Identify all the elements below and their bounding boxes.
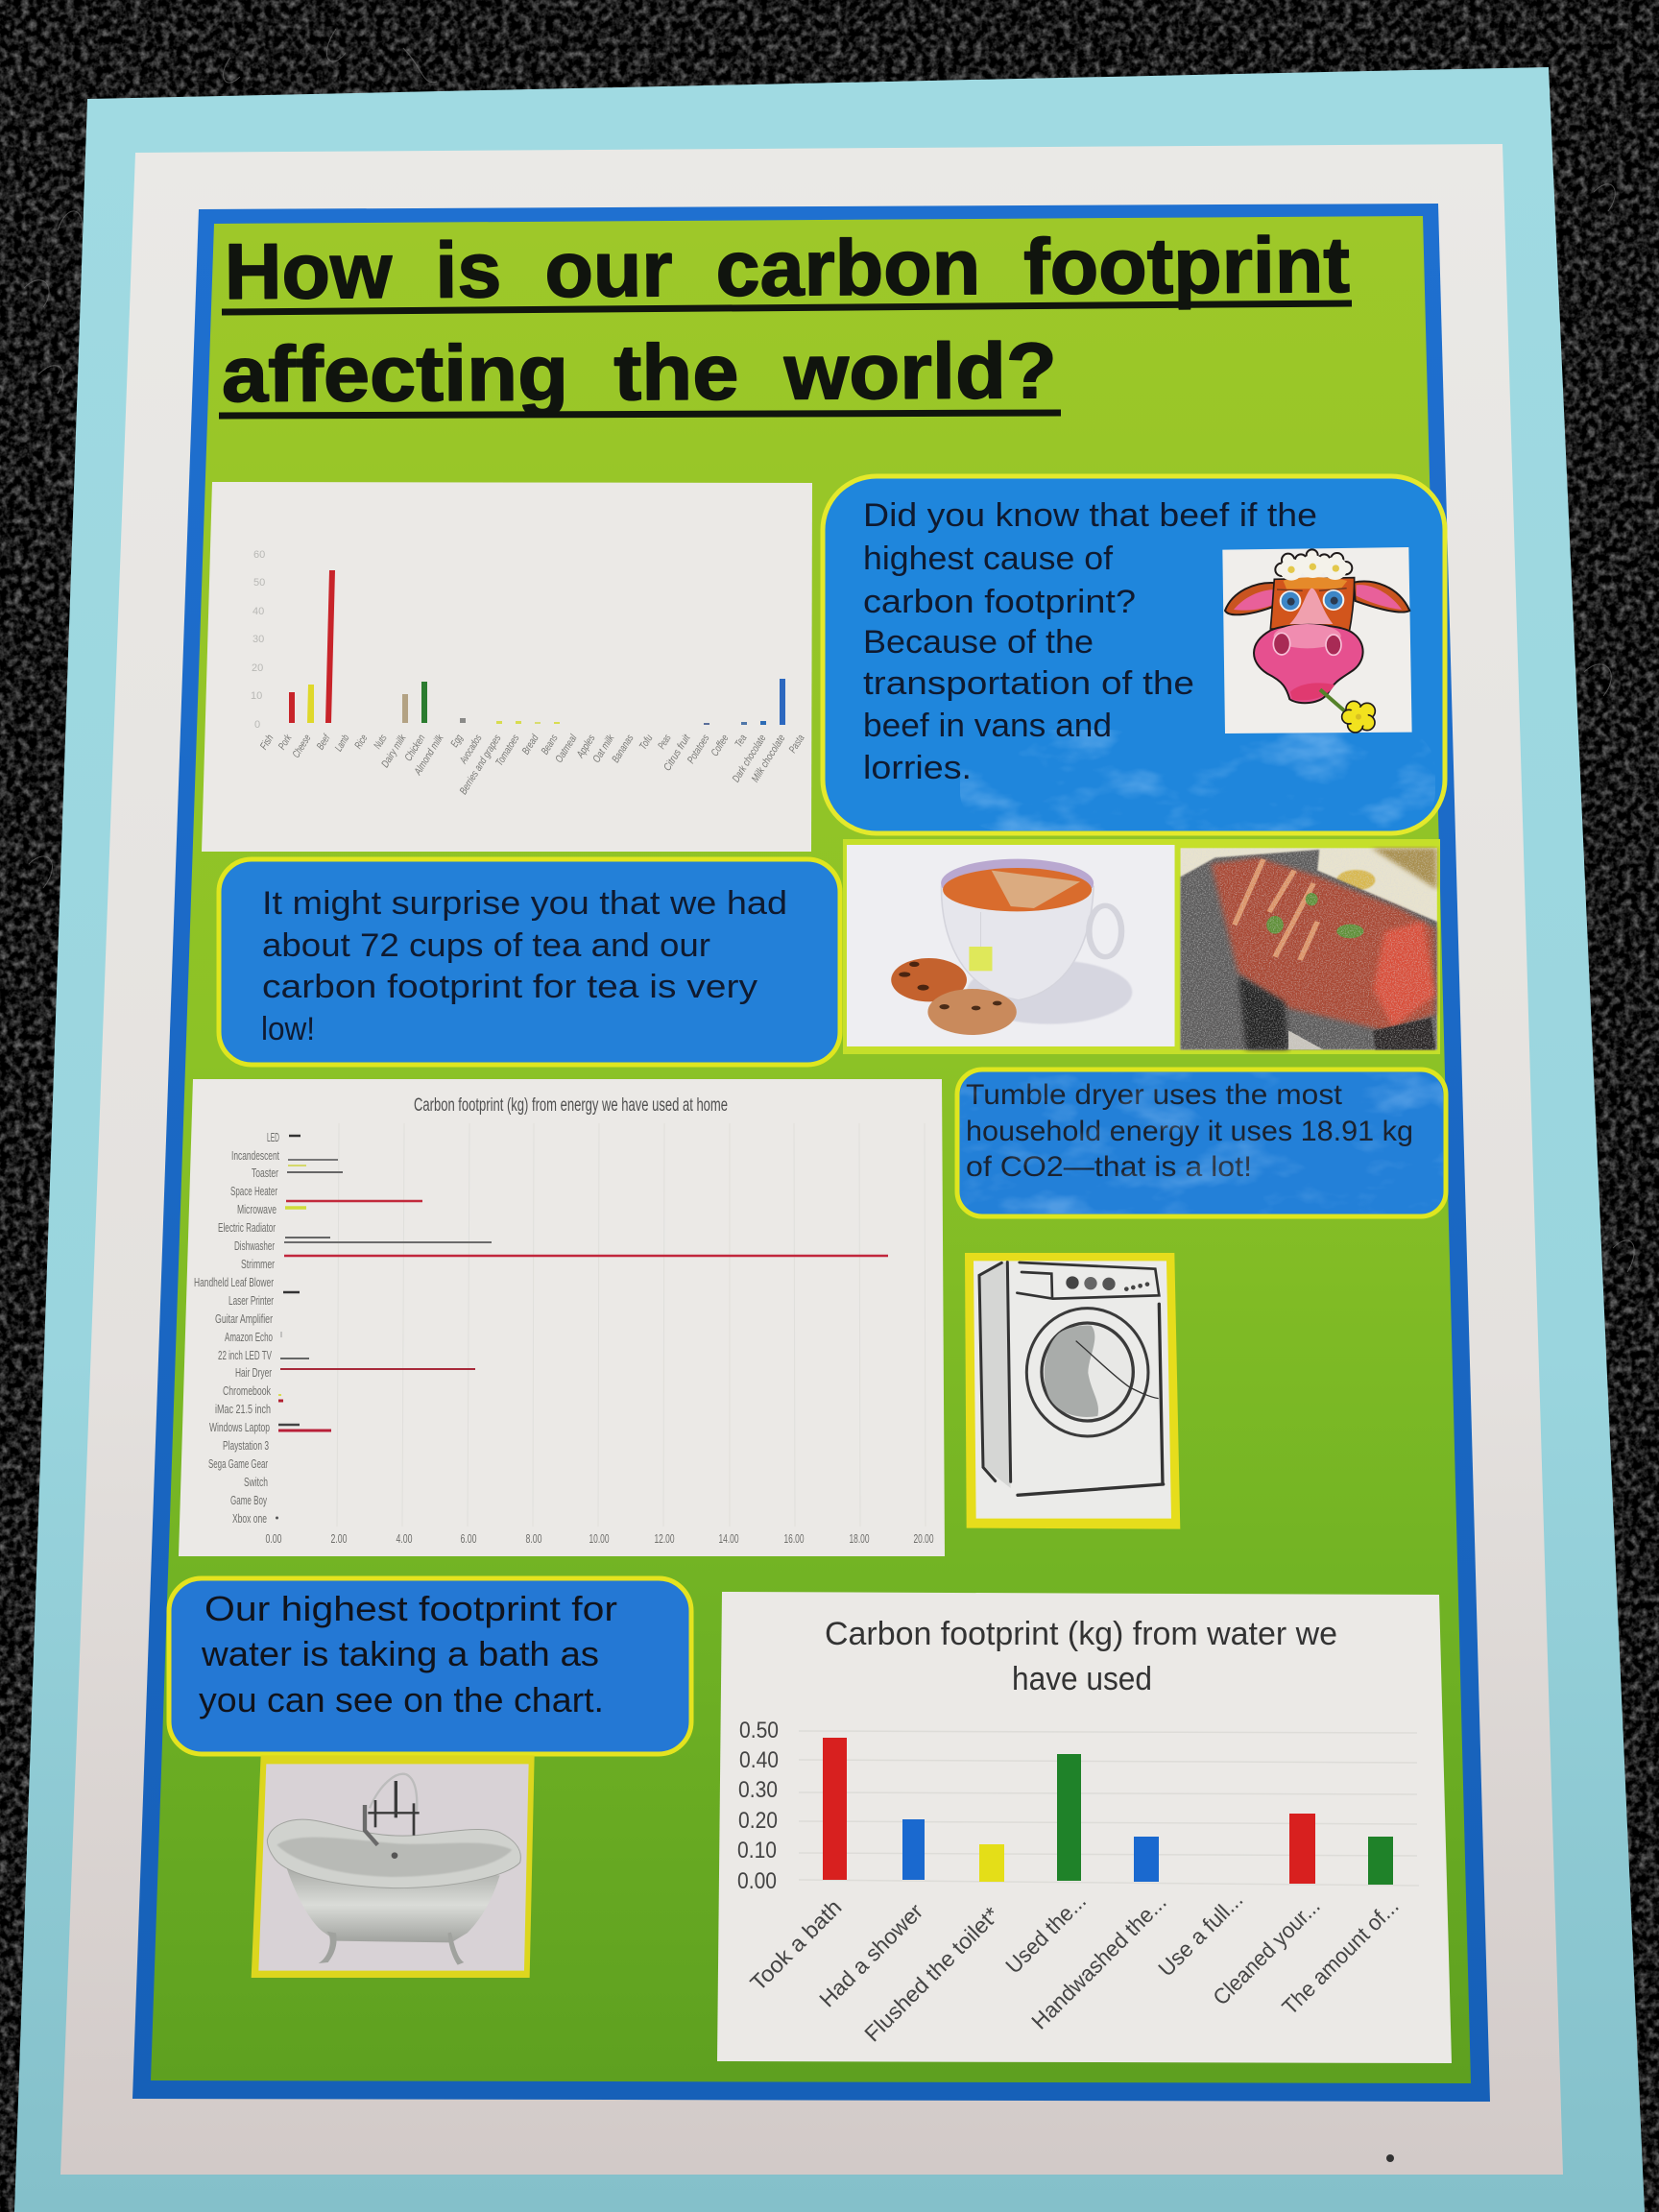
appliance labels: 22 inch LED TV (218, 1348, 272, 1362)
tea text: carbon footprint for tea is very (262, 969, 757, 1005)
appliance labels: Toaster (252, 1166, 278, 1180)
tumble dryer text: Tumble dryer uses the most (966, 1079, 1343, 1111)
appliance labels: Xbox one (232, 1511, 267, 1526)
carpet fibres (24, 29, 1634, 1272)
y axis labels: 60 (253, 549, 265, 561)
tea text: It might surprise you that we had (262, 885, 787, 922)
appliance labels: Windows Laptop (209, 1420, 270, 1434)
appliance labels: Dishwasher (234, 1238, 275, 1253)
energy bars (276, 1136, 888, 1519)
chart title (825, 1616, 1337, 1697)
appliance labels: Laser Printer (228, 1293, 274, 1308)
x axis labels (265, 1531, 933, 1546)
food category labels: Dark chocolate (731, 733, 769, 784)
green panel (151, 216, 1471, 2083)
food category labels: Cheese (291, 733, 314, 760)
activity labels: Cleaned your... (1208, 1893, 1325, 2010)
image: cup of tea and biscuits (847, 845, 1175, 1046)
x axis labels: 6.00 (461, 1531, 476, 1546)
x axis labels: 8.00 (526, 1531, 541, 1546)
y axis labels: 0.00 (737, 1868, 777, 1894)
x axis labels: 18.00 (849, 1531, 870, 1546)
panel: home energy chart (179, 1079, 945, 1556)
x axis labels: 16.00 (783, 1531, 805, 1546)
tumble dryer box (957, 1070, 1446, 1216)
tea text: low! (261, 1011, 315, 1047)
appliance labels: Guitar Amplifier (215, 1311, 273, 1326)
food bars (289, 570, 785, 725)
appliance labels: Strimmer (241, 1257, 275, 1271)
y axis labels: 40 (252, 606, 264, 617)
food category labels: Milk chocolate (750, 733, 788, 784)
appliance labels: LED (267, 1130, 279, 1144)
title line 1: How is our carbon footprint (225, 222, 1350, 316)
appliance labels: Amazon Echo (225, 1330, 273, 1344)
y axis labels: 0 (254, 719, 260, 731)
y axis labels (737, 1718, 779, 1894)
panel: water carbon footprint chart (717, 1592, 1452, 2063)
appliance labels: Handheld Leaf Blower (194, 1275, 274, 1289)
icon: cow with flowers (1222, 547, 1412, 733)
tumble dryer text: household energy it uses 18.91 kg (966, 1116, 1413, 1147)
title line 2: affecting the world? (222, 327, 1057, 419)
chart title: have used (1012, 1661, 1152, 1697)
appliance labels: Electric Radiator (218, 1220, 276, 1235)
food category labels: Nuts (372, 733, 390, 751)
panel: beef fact (823, 476, 1445, 833)
x axis labels: 12.00 (655, 1531, 674, 1546)
beef text: beef in vans and (863, 708, 1112, 744)
food category labels: Oat milk (590, 733, 617, 765)
food category labels: Beans (540, 733, 561, 757)
bath box (169, 1578, 691, 1754)
activity labels: Handwashed the... (1026, 1889, 1171, 2034)
title underline 1 (222, 303, 1352, 312)
appliance labels: Playstation 3 (223, 1438, 269, 1453)
food category labels: Dairy milk (379, 733, 409, 770)
beef box mottling (960, 730, 1435, 830)
appliance labels (194, 1130, 279, 1526)
appliance labels: Sega Game Gear (208, 1456, 268, 1471)
y axis labels: 20 (252, 662, 263, 674)
y axis labels: 0.50 (739, 1718, 779, 1743)
water bars (823, 1738, 1393, 1885)
food category labels: Tomatoes (493, 733, 522, 768)
y axis labels: 30 (252, 634, 264, 645)
panel: bath fact (169, 1578, 691, 1754)
food category labels: Lamb (333, 733, 352, 754)
food category labels: Beef (315, 733, 333, 752)
panel: tumble dryer fact (957, 1070, 1446, 1216)
tea box (219, 859, 840, 1065)
food category labels (258, 733, 807, 797)
activity labels: Used the... (1000, 1887, 1091, 1979)
chart background (202, 482, 812, 852)
tea text (261, 885, 787, 1047)
x axis labels: 2.00 (330, 1531, 348, 1546)
tumble box mottling (960, 1072, 1443, 1214)
food category labels: Tea (733, 733, 750, 750)
food category labels: Rice (352, 733, 371, 751)
food category labels: Coffee (709, 733, 732, 758)
tumble dryer text: of CO2—that is a lot! (966, 1151, 1252, 1183)
ink speck on paper (1386, 2154, 1394, 2162)
food category labels: Oatmeal (553, 733, 580, 765)
title (219, 222, 1352, 419)
beef box (823, 476, 1445, 833)
icon: washing machine (965, 1253, 1180, 1529)
food category labels: Egg (448, 733, 466, 750)
yellow backing for food images (843, 839, 1440, 1054)
y axis labels (251, 549, 265, 731)
appliance labels: iMac 21.5 inch (215, 1402, 271, 1416)
appliance labels: Game Boy (230, 1493, 267, 1507)
panel: food carbon footprint chart (202, 482, 812, 852)
food category labels: Pasta (787, 733, 807, 756)
y axis labels: 0.40 (739, 1747, 779, 1773)
food category labels: Almond milk (412, 733, 446, 778)
appliance labels: Chromebook (223, 1383, 271, 1398)
activity labels: Flushed the toilet* (859, 1902, 1004, 2047)
food category labels: Berries and grapes (458, 733, 504, 797)
food category labels: Apples (574, 733, 598, 760)
activity labels: Had a shower (814, 1898, 927, 2012)
y axis labels: 50 (253, 577, 265, 589)
x axis labels: 4.00 (396, 1531, 413, 1546)
x axis labels: 14.00 (718, 1531, 739, 1546)
appliance labels: Incandescent (231, 1148, 279, 1163)
grid lines (799, 1731, 1419, 1886)
activity labels: Use a full... (1153, 1887, 1247, 1982)
chart title: Carbon footprint (kg) from energy we have used at home (414, 1095, 728, 1116)
chart background (179, 1079, 945, 1556)
beef text: highest cause of (863, 541, 1114, 577)
beef text: carbon footprint? (863, 584, 1136, 620)
image: sliced steak (1181, 848, 1437, 1049)
y axis labels: 0.30 (738, 1777, 778, 1803)
activity labels (745, 1887, 1404, 2047)
bath text: water is taking a bath as (201, 1634, 599, 1673)
icon: bath tub (252, 1755, 535, 1978)
food category labels: Pork (276, 733, 295, 752)
food category labels: Citrus fruit (661, 733, 693, 773)
food category labels: Avocados (458, 733, 485, 766)
food category labels: Tofu (637, 733, 656, 752)
food category labels: Fish (258, 733, 276, 752)
y axis labels: 0.10 (737, 1838, 777, 1863)
beef text: transportation of the (863, 665, 1194, 702)
x axis labels: 10.00 (589, 1531, 609, 1546)
x axis labels: 0.00 (265, 1531, 282, 1546)
food category labels: Bread (520, 733, 541, 757)
chart background (717, 1592, 1452, 2063)
appliance labels: Hair Dryer (235, 1365, 272, 1380)
bath text: you can see on the chart. (199, 1680, 604, 1719)
beef text: Did you know that beef if the (863, 497, 1317, 534)
tumble dryer text (966, 1079, 1413, 1183)
beef text: lorries. (863, 750, 972, 786)
food category labels: Bananas (610, 733, 637, 765)
x axis labels: 20.00 (914, 1531, 933, 1546)
bath text (199, 1589, 617, 1719)
bath text: Our highest footprint for (204, 1589, 617, 1628)
tea text: about 72 cups of tea and our (262, 927, 710, 964)
chart title: Carbon footprint (kg) from water we (825, 1616, 1337, 1652)
food category labels: Chicken (402, 733, 428, 763)
vertical grid lines (337, 1123, 926, 1527)
appliance labels: Switch (244, 1475, 268, 1489)
title underline 2 (219, 413, 1061, 416)
food category labels: Potatoes (685, 733, 712, 766)
activity labels: The amount of... (1277, 1893, 1404, 2020)
panel: tea fact (219, 859, 840, 1065)
beef text: Because of the (863, 624, 1094, 661)
appliance labels: Space Heater (230, 1184, 277, 1198)
y axis labels: 10 (251, 690, 262, 702)
food category labels: Peas (656, 733, 674, 751)
beef text (863, 497, 1317, 786)
y axis labels: 0.20 (738, 1808, 778, 1834)
activity labels: Took a bath (745, 1894, 847, 1996)
appliance labels: Microwave (237, 1202, 276, 1216)
blue border (132, 204, 1490, 2102)
